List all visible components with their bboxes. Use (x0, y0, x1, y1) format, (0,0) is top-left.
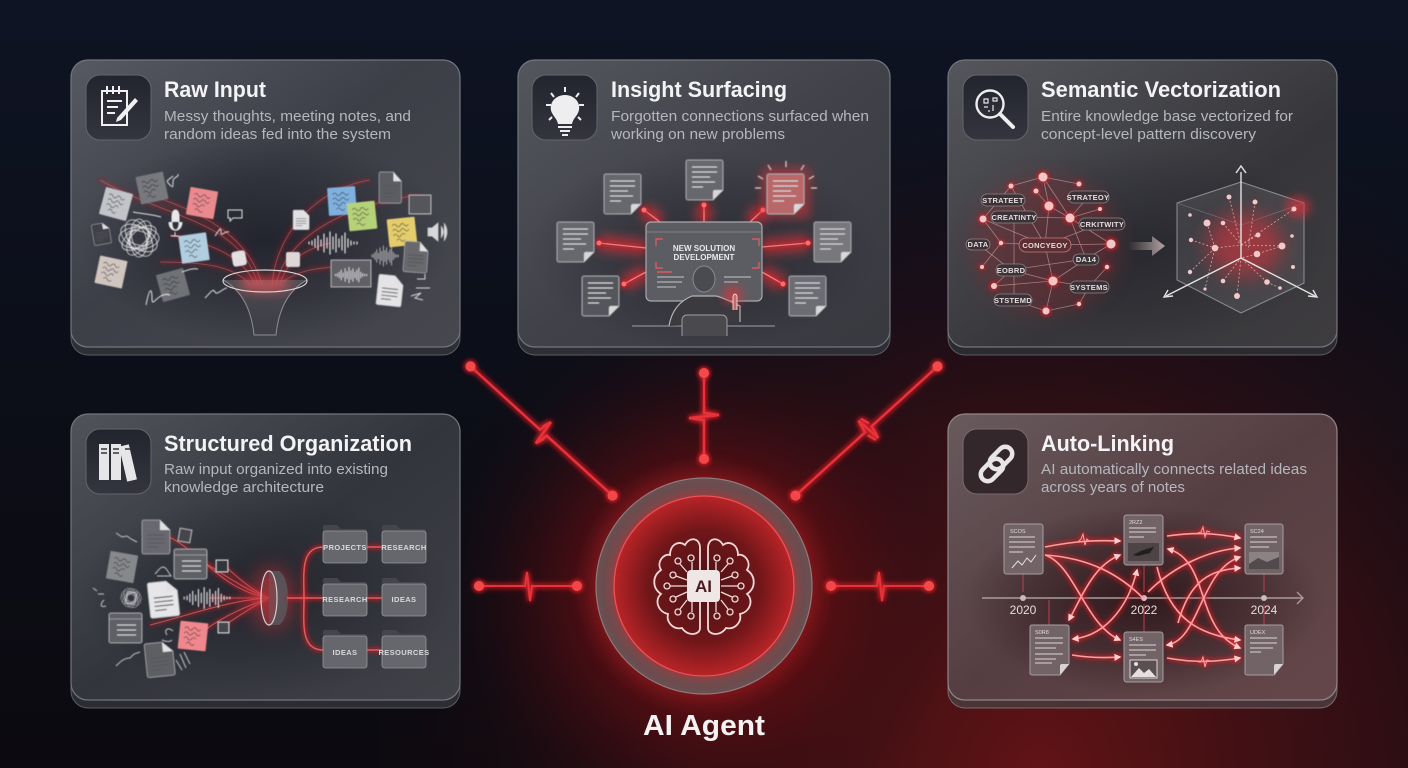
linked note cards: S4ES (1129, 637, 1143, 643)
folder tree: IDEAS (333, 648, 357, 657)
concept network: EOBRD (997, 266, 1026, 275)
connector: top left (458, 353, 625, 509)
3D vector cube (1164, 166, 1317, 313)
icon: magnifier (963, 75, 1028, 140)
description: random ideas fed into the system (164, 127, 391, 143)
red beams (596, 202, 810, 286)
funnel (223, 270, 307, 335)
panel: structured organization (71, 414, 460, 708)
panel: auto-linking (948, 414, 1337, 708)
timeline: 2024 (1251, 603, 1278, 617)
hub label: AI Agent (643, 710, 765, 742)
connector: top right (783, 353, 950, 509)
linked note cards: SC24 (1250, 529, 1264, 535)
description: Raw input organized into existing (164, 462, 388, 478)
concept network: CRKITWITY (1080, 220, 1124, 229)
concept network: SYSTEMS (1070, 283, 1108, 292)
linked note cards: S0R8 (1035, 630, 1049, 636)
linked note cards: SCOS (1010, 529, 1026, 535)
red streams into funnel (100, 180, 420, 285)
person at desk (632, 266, 775, 336)
icon: AI brain (654, 539, 754, 634)
description: Entire knowledge base vectorized for (1041, 109, 1293, 125)
icon: books (86, 429, 151, 494)
concept network (966, 172, 1125, 315)
monitor: new solution development: NEW SOLUTION (673, 244, 735, 253)
timeline: 2020 (1010, 603, 1037, 617)
connector: left (474, 572, 582, 601)
red streams to lens (150, 535, 269, 630)
heading: Insight Surfacing (611, 77, 787, 102)
icon: notepad (86, 75, 151, 140)
concept network: CREATINTY (991, 213, 1037, 222)
panel: semantic vectorization (948, 60, 1337, 355)
description: across years of notes (1041, 480, 1185, 496)
incoming documents and notes (93, 520, 230, 678)
heading: Raw Input (164, 77, 267, 102)
timeline: 2022 (1131, 603, 1158, 617)
lens cylinder (252, 568, 292, 628)
panel: insight surfacing (518, 60, 890, 355)
folder tree: RESEARCH (322, 595, 368, 604)
folder tree: PROJECTS (323, 543, 367, 552)
concept network: STRATEET (982, 196, 1024, 205)
arrow: network to vector space (1128, 236, 1165, 256)
central AI hub (588, 470, 820, 702)
scattered documents right (286, 172, 447, 307)
description: Forgotten connections surfaced when (611, 109, 869, 125)
description: working on new problems (610, 127, 785, 143)
heading: Auto-Linking (1041, 431, 1174, 456)
folder tree: IDEAS (392, 595, 416, 604)
linked note cards (1004, 515, 1283, 682)
folder tree: RESOURCES (378, 648, 430, 657)
surrounding documents (557, 160, 851, 316)
scattered notes left (91, 171, 247, 305)
timeline (982, 565, 1303, 632)
monitor: new solution development: DEVELOPMENT (674, 253, 735, 262)
linked note cards: UDEX (1250, 630, 1266, 636)
heading: Structured Organization (164, 431, 412, 456)
concept network: CONCYEOY (1022, 241, 1068, 250)
icon: AI brain: AI (695, 577, 712, 596)
description: concept-level pattern discovery (1041, 127, 1257, 143)
description: Messy thoughts, meeting notes, and (164, 109, 411, 125)
folder tree: RESEARCH (381, 543, 427, 552)
folder tree (287, 525, 430, 668)
connector: right (826, 572, 934, 601)
icon: light bulb (532, 75, 597, 140)
concept network: STRATEOY (1067, 193, 1109, 202)
icon: chain link (963, 429, 1028, 494)
heading: Semantic Vectorization (1041, 77, 1281, 102)
panel: raw input (71, 60, 460, 355)
linked note cards: 2RZ2 (1129, 520, 1142, 526)
concept network: DATA (968, 240, 989, 249)
description: knowledge architecture (164, 480, 324, 496)
monitor: new solution development (646, 222, 762, 301)
concept network: STSTEMD (994, 296, 1032, 305)
concept network: DA14 (1076, 255, 1097, 264)
connector: top (689, 368, 719, 464)
description: AI automatically connects related ideas (1041, 462, 1307, 478)
red link arrows (1045, 527, 1240, 667)
